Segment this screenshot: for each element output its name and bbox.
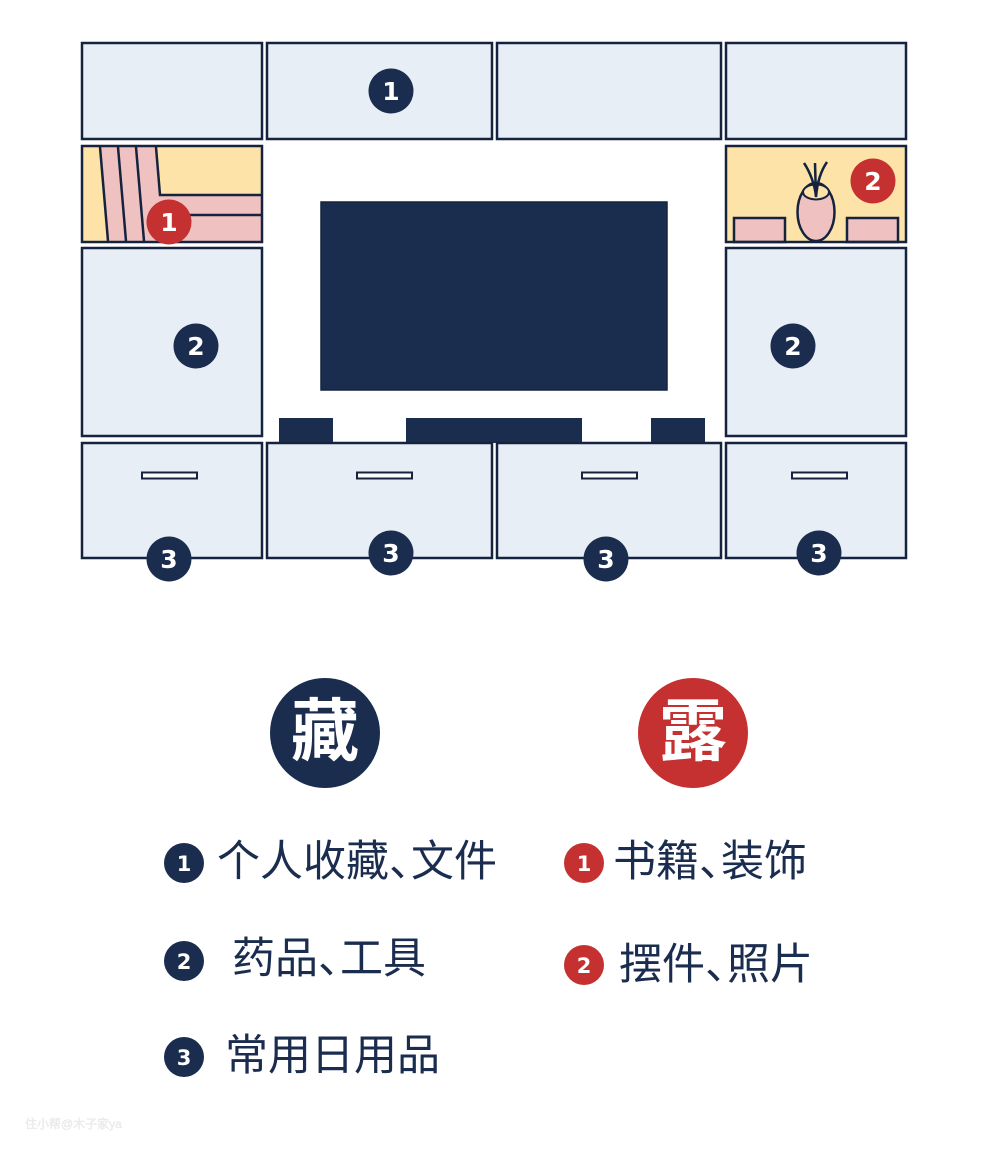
left open shelf with books (82, 146, 262, 242)
marker: top 1: 1 (382, 77, 400, 106)
television (321, 202, 667, 390)
list item: shown 1: 书籍、装饰 (613, 838, 807, 886)
middle cabinets (82, 248, 906, 436)
marker: right 2 (770, 324, 816, 368)
list item: shown 2: 摆件、照片 (619, 941, 813, 989)
list item: shown 2: 2 (577, 954, 591, 978)
marker: drawer 3 a (146, 536, 192, 582)
marker: drawer 3 c: 3 (597, 545, 615, 574)
marker: drawer 3 b (368, 530, 414, 576)
list item: hidden 2: 药品、工具 (232, 935, 426, 983)
heading: 露 (638, 678, 748, 788)
list item: hidden 1: 个人收藏、文件 (217, 838, 497, 886)
list item: hidden 1: 1 (177, 852, 191, 876)
soundbar and speakers (279, 418, 705, 443)
marker: drawer 3 b: 3 (382, 539, 400, 568)
watermark: 住小帮@木子家ya (25, 1116, 122, 1131)
marker: red 1: 1 (160, 208, 178, 237)
marker: drawer 3 c (584, 536, 628, 582)
list item: hidden 3: 常用日用品 (225, 1032, 440, 1080)
marker: red 2: 2 (864, 167, 882, 196)
marker: drawer 3 d: 3 (810, 539, 828, 568)
marker: drawer 3 d (796, 530, 842, 576)
heading: 藏: 藏 (291, 694, 359, 770)
marker: right 2: 2 (784, 332, 802, 361)
bottom drawers (82, 443, 906, 558)
heading: 露: 露 (659, 694, 727, 770)
panel: cabinet diagram (82, 43, 906, 582)
marker: left 2: 2 (187, 332, 205, 361)
marker: drawer 3 a: 3 (160, 545, 178, 574)
list item: shown 1: 1 (577, 852, 591, 876)
right open shelf with vase (726, 146, 906, 242)
list item: hidden 3: 3 (177, 1046, 191, 1070)
marker: left 2 (174, 324, 218, 368)
marker: red 1 (146, 200, 192, 244)
marker: red 2 (850, 158, 896, 204)
marker: top 1 (368, 68, 414, 114)
top cabinets (82, 43, 906, 139)
list item: hidden 2: 2 (177, 950, 191, 974)
heading: 藏 (270, 678, 380, 788)
